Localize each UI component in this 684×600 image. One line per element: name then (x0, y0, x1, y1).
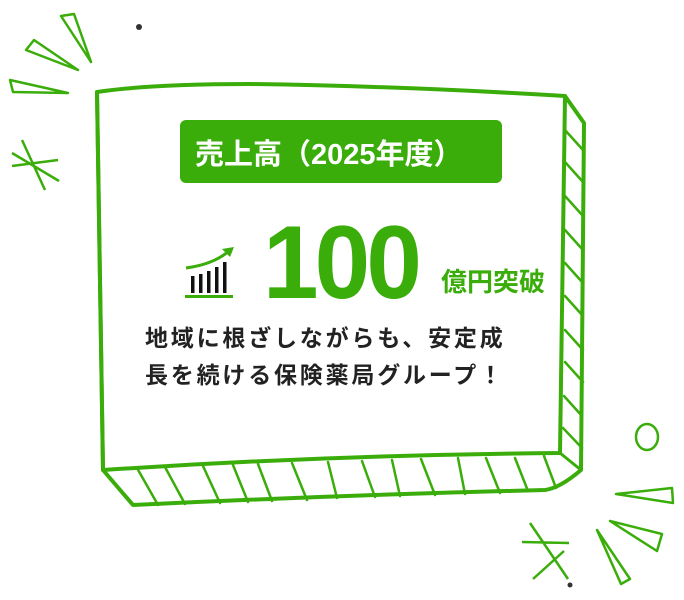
icon: rising chart (185, 247, 234, 298)
decoration: top-left bursts (10, 14, 91, 190)
description text: 地域に根ざしながらも、安定成 (145, 325, 506, 351)
card: 3D hatched box (97, 84, 584, 505)
big number: 100 (263, 204, 418, 320)
description text (145, 325, 506, 388)
decoration: bottom-right bursts (522, 424, 673, 584)
heading pill (180, 120, 502, 183)
heading pill: 売上高（2025年度） (195, 138, 463, 171)
decoration: dot bottom (568, 582, 572, 588)
description text: 長を続ける保険薬局グループ！ (145, 362, 505, 388)
unit text: 億円突破 (441, 267, 545, 297)
decoration: dot top (136, 24, 142, 30)
